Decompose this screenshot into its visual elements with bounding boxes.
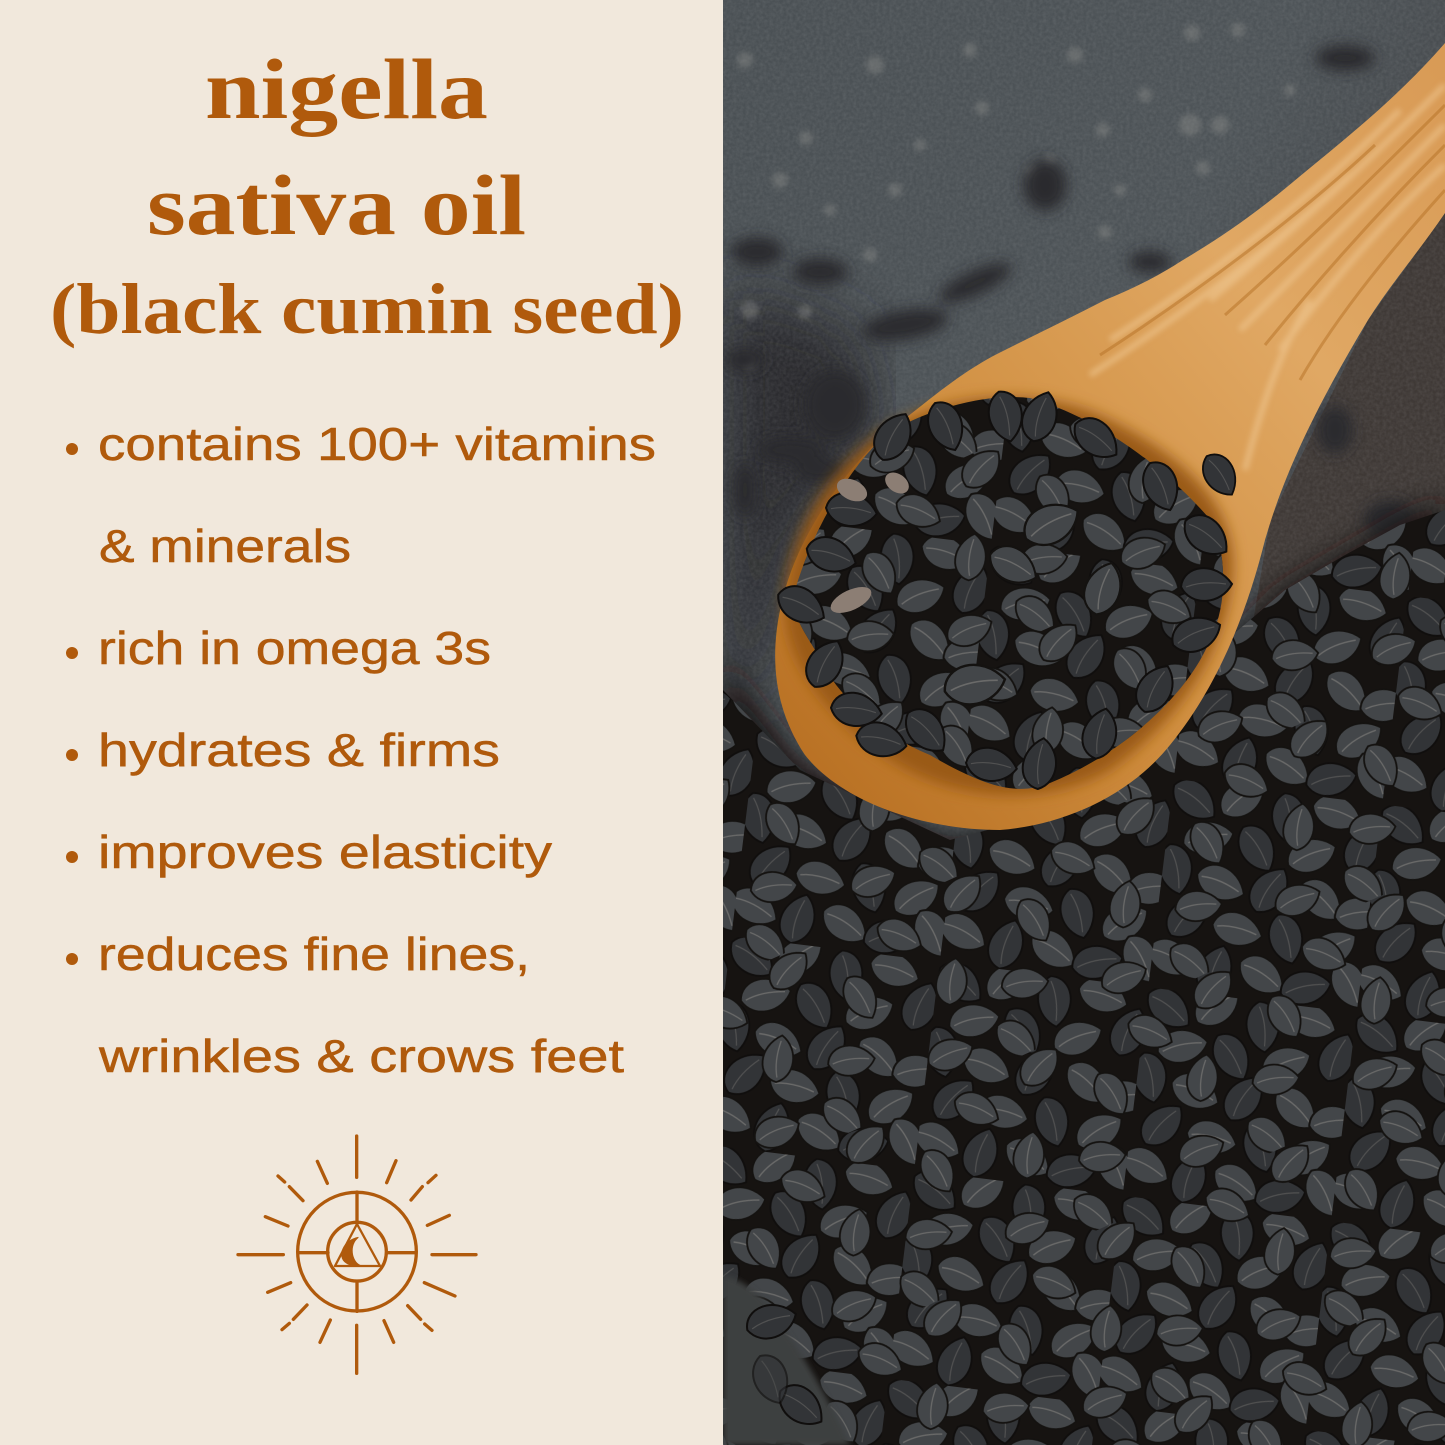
- bullet: fine lines: [66, 928, 624, 1082]
- bullet: vitamins and minerals: contains 100+ vitamins: [98, 418, 656, 470]
- title line: black cumin seed: (black cumin seed): [50, 269, 684, 349]
- title: [50, 41, 684, 349]
- icon: sun with moon and triangle: [238, 1136, 476, 1373]
- spoon bowl shadow: [785, 397, 1233, 795]
- seed pile: [723, 510, 1445, 1445]
- benefits list: [66, 418, 656, 1082]
- bowl edge seeds: [771, 387, 1237, 791]
- bullet: omega 3s: rich in omega 3s: [98, 622, 491, 674]
- brown slate right of handle: [1250, 213, 1445, 640]
- slate patch bottom left: [723, 1275, 850, 1445]
- bullet: vitamins and minerals: [66, 418, 656, 572]
- slate background: [723, 0, 1445, 840]
- title line: nigella: nigella: [205, 41, 488, 137]
- slate left shadow: [723, 280, 880, 700]
- blurred scattered seeds: [725, 45, 1416, 540]
- panel: text background: [0, 0, 723, 1445]
- bullet: fine lines: reduces fine lines,: [98, 928, 530, 980]
- title line: sativa oil: sativa oil: [147, 157, 526, 253]
- seed pile shadow: [723, 492, 1445, 840]
- bullet: fine lines: wrinkles & crows feet: [98, 1030, 624, 1082]
- slate texture: [723, 0, 1445, 722]
- spoon handle and bowl: [775, 43, 1445, 830]
- photo: seeds on wooden spoon: [723, 0, 1445, 1445]
- large foreground seeds: [1202, 454, 1236, 496]
- bullet: elasticity: improves elasticity: [98, 826, 552, 878]
- pale husks: [830, 472, 909, 613]
- bullet: hydrates and firms: hydrates & firms: [98, 724, 500, 776]
- bullet: vitamins and minerals: & minerals: [99, 520, 351, 572]
- spoon wood grain: [1090, 85, 1445, 470]
- seeds in bowl: [771, 387, 1244, 791]
- scattered seeds bottom left: [746, 1304, 822, 1425]
- slate speckles: [737, 23, 1296, 371]
- spoon: [771, 43, 1445, 830]
